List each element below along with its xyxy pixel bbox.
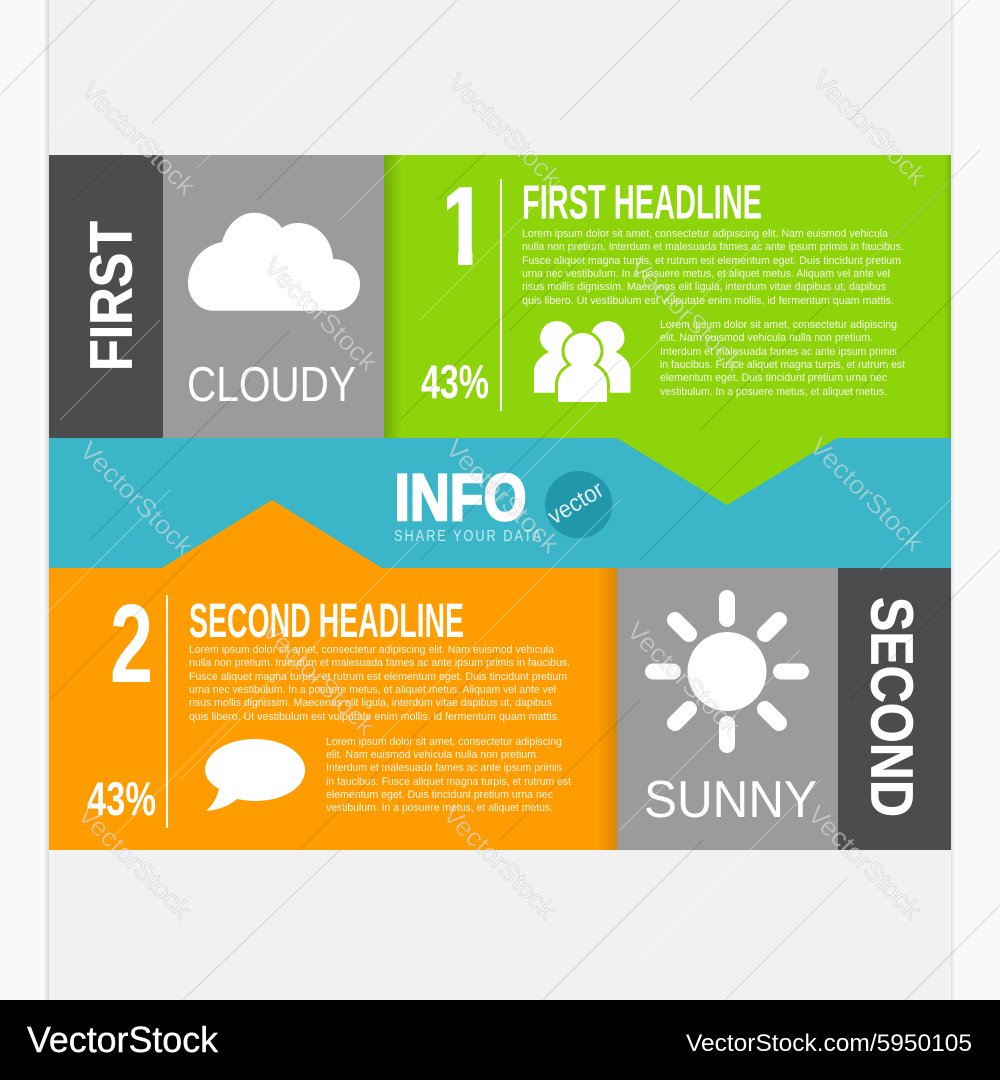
body text <box>189 644 570 723</box>
headline: SECOND HEADLINE <box>189 595 464 648</box>
watermarks: VectorStock <box>256 615 382 742</box>
title: info: INFO <box>394 460 526 534</box>
icon: speech bubble <box>205 739 305 811</box>
body text: quis libero. Ut vestibulum est vulputate enim mollis, id fermentum quam mattis. <box>522 295 894 307</box>
watermarks: VectorStock <box>72 799 198 926</box>
watermarks: VectorStock <box>621 615 747 742</box>
panel: sunny <box>617 568 838 850</box>
watermarks: VectorStock <box>624 251 750 378</box>
body text 2: vestibulum. In a posuere metus, et aliquet metus. <box>660 386 887 398</box>
body text 2: vestibulum. In a posuere metus, et aliquet metus. <box>326 802 553 814</box>
watermarks: VectorStock <box>807 65 933 192</box>
body text: Fusce aliquet magna turpis, et rutrum est elementum eget. Duis tincidunt pretium <box>189 671 567 683</box>
panel: first label <box>49 155 163 438</box>
watermarks: VectorStock <box>437 799 563 926</box>
body text 2 <box>660 319 905 398</box>
body text: quis libero. Ut vestibulum est vulputate enim mollis, id fermentum quam mattis. <box>189 711 560 723</box>
body text 2: elementum eget. Duis tincidunt pretium urna nec <box>660 372 888 384</box>
body text 2 <box>326 736 571 814</box>
body text 2: Interdum et malesuada fames ac ante ipsum primis <box>326 762 563 774</box>
body text: Fusce aliquet magna turpis, et rutrum est elementum eget. Duis tincidunt pretium <box>522 255 901 267</box>
title: info: SHARE YOUR DATA <box>394 528 542 545</box>
watermarks: VectorStock <box>440 433 566 560</box>
panel: second label: SECOND <box>858 597 924 817</box>
body text: nulla non pretium. Interdum et malesuada fames ac ante ipsum primis in faucibus. <box>522 241 904 253</box>
watermarks: VectorStock <box>442 67 568 194</box>
number 1: 1 <box>438 164 488 288</box>
watermarks <box>72 65 933 926</box>
body text: urna nec vestibulum. In a posuere metus, et aliquet metus. Aliquam vel ante vel <box>522 268 890 280</box>
body text: urna nec vestibulum. In a posuere metus, et aliquet metus. Aliquam vel ante vel <box>189 684 556 696</box>
icon: people <box>534 321 630 402</box>
watermarks: VectorStock <box>74 435 200 562</box>
body text 2: Lorem ipsum dolor sit amet, consectetur adipiscing <box>326 736 562 748</box>
title: info <box>394 460 612 545</box>
body text: Lorem ipsum dolor sit amet, consectetur adipiscing elit. Nam euismod vehicula <box>189 644 554 656</box>
watermarks: VectorStock <box>76 75 202 202</box>
vector badge: vector <box>543 476 609 530</box>
body text: nulla non pretium. Interdum et malesuada fames ac ante ipsum primis in faucibus. <box>189 657 570 669</box>
panel: first headline green <box>384 155 951 505</box>
body text 2: elementum eget. Duis tincidunt pretium urna nec <box>326 789 554 801</box>
panel: cloudy: CLOUDY <box>187 358 356 412</box>
panel: cloudy <box>163 155 384 438</box>
body text <box>522 228 904 307</box>
number 2: 2 <box>110 582 153 706</box>
panel: second label <box>838 568 951 850</box>
watermarks: VectorStock <box>258 251 384 378</box>
body text 2: elit. Nam euismod vehicula nulla non pretium. <box>660 332 873 344</box>
footer bar: VectorStock <box>27 1019 219 1060</box>
body text: risus mollis dignissim. Maecenas elit ligula, interdum vitae dapibus ut, dapibus <box>189 697 553 709</box>
body text 2: in faucibus. Fusce aliquet magna turpis, et rutrum est <box>660 359 905 371</box>
body text: risus mollis dignissim. Maecenas elit ligula, interdum vitae dapibus ut, dapibus <box>522 281 887 293</box>
watermarks: VectorStock <box>804 431 930 558</box>
footer bar: VectorStock.com/5950105 <box>686 1030 972 1057</box>
footer bar <box>0 1000 1000 1080</box>
body text: Lorem ipsum dolor sit amet, consectetur adipiscing elit. Nam euismod vehicula <box>522 228 888 240</box>
icon: cloud <box>188 213 360 311</box>
percentage: 43% <box>421 355 489 408</box>
body text 2: Interdum et malesuada fames ac ante ipsum primis <box>660 346 898 358</box>
body text 2: in faucibus. Fusce aliquet magna turpis, et rutrum est <box>326 776 571 788</box>
panel: first label: FIRST <box>78 221 144 371</box>
body text 2: Lorem ipsum dolor sit amet, consectetur adipiscing <box>660 319 897 331</box>
percentage: 43% <box>87 772 156 825</box>
icon: sun <box>653 598 801 745</box>
panel: second headline orange <box>49 500 617 850</box>
panel: sunny: SUNNY <box>644 771 817 829</box>
headline: FIRST HEADLINE <box>522 176 762 230</box>
panel: blue info band <box>49 438 951 568</box>
watermarks: VectorStock <box>802 799 928 926</box>
body text 2: elit. Nam euismod vehicula nulla non pretium. <box>326 749 539 761</box>
